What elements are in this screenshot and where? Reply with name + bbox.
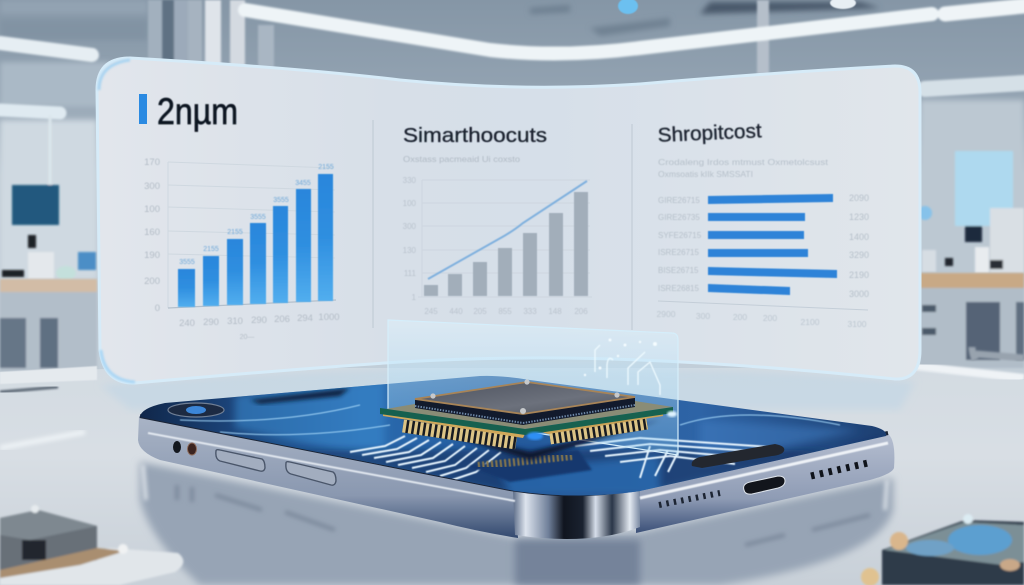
chart: blue bar chart: 2155 (227, 229, 243, 236)
heading: 2nm: 2nµm (157, 91, 238, 132)
side buttons and ports (173, 441, 868, 505)
chart: blue bar chart: 160 (144, 227, 160, 238)
subheading: right chart: Crodaleng Irdos mtmust Oxmetolcsust (658, 157, 829, 167)
phone side: right (636, 434, 894, 533)
chip glow (527, 432, 543, 440)
foreground chip right (861, 514, 1024, 585)
chart: grey bars with trend line: 855 (498, 307, 512, 316)
chart: grey bars with trend line: 440 (449, 307, 463, 316)
chart: grey bars with trend line: 245 (424, 307, 438, 316)
chart: horizontal bars: 2090 (849, 193, 869, 203)
chart: blue bar chart (144, 157, 340, 341)
ceiling lights (0, 6, 1024, 113)
hologram plate (388, 320, 678, 455)
chip shadow (400, 420, 660, 460)
chart: grey bars with trend line: 100 (403, 199, 417, 208)
chip (380, 379, 677, 460)
chart: grey bars with trend line: 111 (404, 269, 417, 278)
chart: horizontal bars: GIRE26715 (658, 196, 700, 205)
chart: blue bar chart: 3455 (295, 180, 311, 187)
chart: horizontal bars: BISE26715 (658, 266, 699, 275)
subheading: right chart (658, 157, 829, 179)
chart: horizontal bars: 3000 (849, 289, 869, 299)
chart: horizontal bars: ISRE26815 (658, 284, 699, 293)
chart: blue bar chart: 300 (144, 181, 160, 192)
phone side: left (138, 416, 518, 538)
chart: grey bars with trend line: 333 (523, 307, 537, 316)
chart: grey bars with trend line: 330 (403, 176, 417, 185)
chart: horizontal bars: GIRE26735 (658, 213, 700, 222)
chart: grey bars with trend line: 205 (473, 307, 487, 316)
chart: blue bar chart: 3555 (250, 214, 266, 221)
phone (138, 376, 894, 539)
chart: blue bar chart: 3555 (179, 259, 195, 266)
chart: grey bars with trend line: 1 (412, 293, 417, 302)
chart: horizontal bars: SYFE26715 (658, 231, 702, 240)
chart: blue bar chart: 0 (155, 303, 160, 314)
chart: horizontal bars: ISRE26715 (658, 248, 699, 257)
chart: blue bar chart: 290 (251, 315, 267, 326)
chart: horizontal bars: 2190 (849, 270, 869, 280)
phone screen (140, 376, 886, 496)
chart: horizontal bars: 1230 (849, 212, 869, 222)
right monitor (918, 151, 1024, 273)
chart: blue bar chart: 206 (274, 314, 290, 325)
chip board (380, 384, 673, 429)
chart: horizontal bars: 200 (733, 312, 747, 322)
camera (168, 403, 224, 417)
chart: horizontal bars: 200 (763, 313, 777, 323)
subheading: right chart: Oxmsoatis kIIk SMSSATI (658, 169, 753, 179)
chip lid (415, 386, 635, 425)
panel: glass dashboard (97, 58, 920, 383)
background columns (148, 0, 769, 74)
chart: blue bar chart: 200 (144, 276, 160, 287)
screen reflections and circuits (180, 384, 852, 496)
chart: horizontal bars: 2100 (801, 317, 820, 327)
blue ceiling lamp (618, 0, 638, 14)
chart: blue bar chart: 294 (297, 313, 313, 324)
chart: horizontal bars (657, 193, 869, 329)
chart: blue bar chart: 3555 (273, 197, 289, 204)
chart: horizontal bars: 1400 (849, 232, 869, 242)
chart: grey bars with trend line: 148 (548, 307, 562, 316)
table (0, 368, 1024, 585)
chip screws (430, 379, 620, 414)
chart: grey bars with trend line: 130 (403, 246, 417, 255)
chart: blue bar chart: 2155 (203, 246, 219, 253)
chart: blue bar chart: 290 (203, 317, 219, 328)
subheading: middle chart: Oxstass pacmeaid Ui coxsto (403, 154, 520, 164)
speaker slot on screen (692, 444, 784, 468)
left counter (0, 279, 97, 372)
chart: horizontal bars: 3100 (848, 319, 867, 329)
chart: blue bar chart: 1000 (318, 312, 340, 323)
hologram circuit traces (595, 345, 660, 395)
heading: Shropitcost: Shropitcost (657, 119, 762, 147)
chart: blue bar chart: 170 (144, 157, 160, 168)
chart: blue bar chart: 240 (179, 318, 195, 329)
chart: blue bar chart: 190 (144, 250, 160, 261)
chip pins (403, 423, 647, 443)
foreground chip left (0, 505, 183, 585)
chart: horizontal bars: 3290 (849, 250, 869, 260)
chart: blue bar chart: 310 (227, 316, 243, 327)
chart: grey bars with trend line (403, 176, 592, 316)
right counter (920, 273, 1024, 368)
chart: grey bars with trend line: 206 (574, 307, 588, 316)
heading: Simarthoocuts: Simarthoocuts (403, 124, 547, 147)
chart: blue bar chart: 20— (240, 334, 254, 341)
chart: grey bars with trend line: 300 (403, 222, 417, 231)
chart: blue bar chart: 2155 (318, 164, 334, 171)
left monitor (2, 115, 96, 280)
chart: horizontal bars: 2900 (657, 309, 676, 319)
chart: blue bar chart: 100 (144, 204, 160, 215)
phone reflection on table (140, 462, 893, 585)
chart: horizontal bars: 300 (696, 311, 710, 321)
phone front corner (513, 490, 640, 539)
